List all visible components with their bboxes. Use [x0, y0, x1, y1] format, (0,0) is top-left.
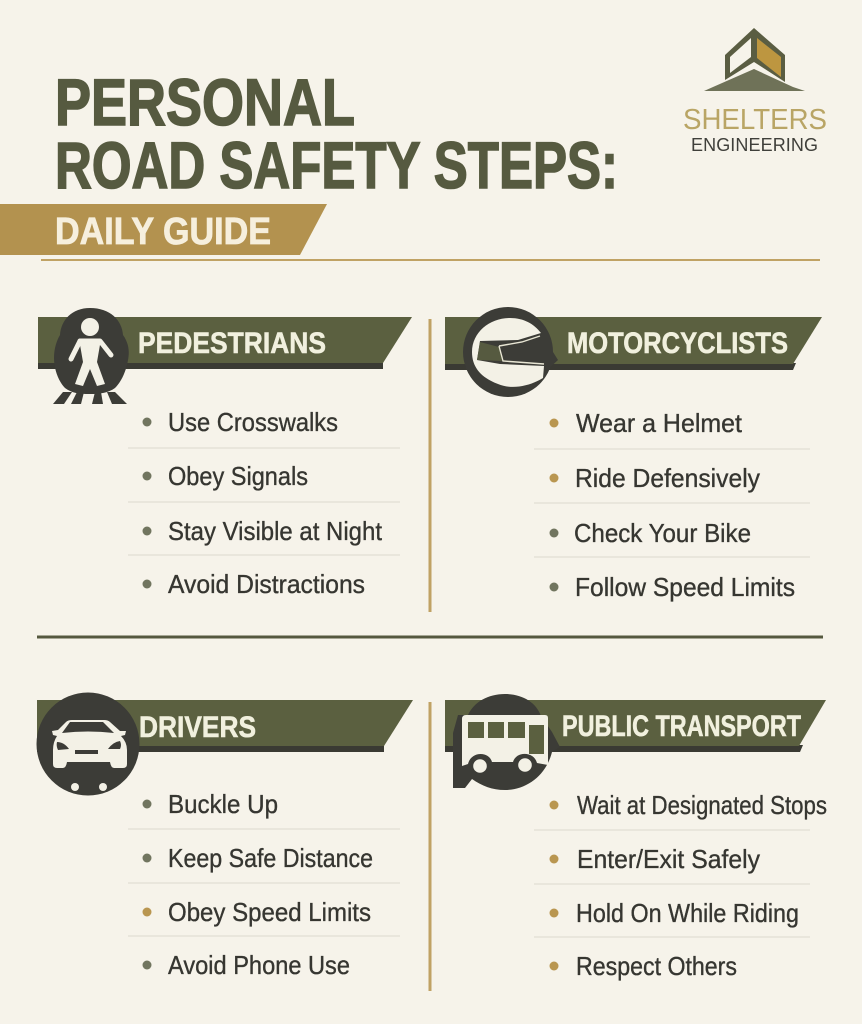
- logo: Shelters Engineering: [683, 28, 827, 155]
- list: motorcyclists: Wear a Helmet: [576, 408, 743, 438]
- list: motorcyclists: Ride Defensively: [575, 463, 760, 493]
- title: PERSONAL: [55, 65, 355, 139]
- subtitle ribbon: daily guide: DAILY GUIDE: [55, 211, 271, 253]
- heading: public transport: PUBLIC TRANSPORT: [562, 710, 801, 743]
- icon: car: [36, 692, 140, 796]
- panel: public transport: [445, 694, 827, 981]
- list: public transport: Hold On While Riding: [576, 898, 799, 928]
- heading: motorcyclists: MOTORCYCLISTS: [567, 327, 788, 360]
- banner: public transport: [445, 700, 826, 752]
- banner: pedestrians: [38, 317, 412, 369]
- heading: pedestrians: PEDESTRIANS: [138, 327, 326, 360]
- list: drivers: Obey Speed Limits: [168, 897, 371, 927]
- list: public transport: [534, 790, 827, 981]
- logo: Shelters Engineering: SHELTERS: [683, 104, 827, 136]
- panel: motorcyclists: [445, 307, 822, 602]
- list: drivers: [128, 789, 400, 980]
- list: public transport: Enter/Exit Safely: [577, 844, 760, 874]
- list: pedestrians: Use Crosswalks: [168, 407, 338, 437]
- icon: bus: [453, 694, 560, 790]
- icon: pedestrian on crosswalk: [53, 308, 129, 404]
- list: motorcyclists: Check Your Bike: [574, 518, 751, 548]
- banner: motorcyclists: [445, 317, 822, 370]
- list: pedestrians: Obey Signals: [168, 461, 308, 491]
- list: drivers: Keep Safe Distance: [168, 843, 373, 873]
- list: motorcyclists: Follow Speed Limits: [575, 572, 795, 602]
- list: pedestrians: Avoid Distractions: [168, 569, 365, 599]
- list: drivers: Avoid Phone Use: [168, 950, 350, 980]
- panel: drivers: [36, 692, 413, 980]
- title: ROAD SAFETY STEPS:: [55, 128, 618, 202]
- panel: pedestrians: [38, 308, 412, 599]
- heading: drivers: DRIVERS: [139, 711, 256, 744]
- banner: drivers: [37, 700, 413, 752]
- list: motorcyclists: [534, 408, 810, 602]
- logo: Shelters Engineering: ENGINEERING: [691, 135, 818, 155]
- list: pedestrians: [128, 407, 400, 599]
- logo icon: house and roof: [704, 28, 805, 91]
- subtitle ribbon: daily guide: [0, 204, 327, 255]
- icon: helmet: [463, 307, 558, 397]
- list: pedestrians: Stay Visible at Night: [168, 516, 383, 546]
- list: public transport: Respect Others: [576, 951, 737, 981]
- title: [55, 65, 618, 202]
- list: public transport: Wait at Designated Stops: [577, 790, 827, 820]
- list: drivers: Buckle Up: [168, 789, 278, 819]
